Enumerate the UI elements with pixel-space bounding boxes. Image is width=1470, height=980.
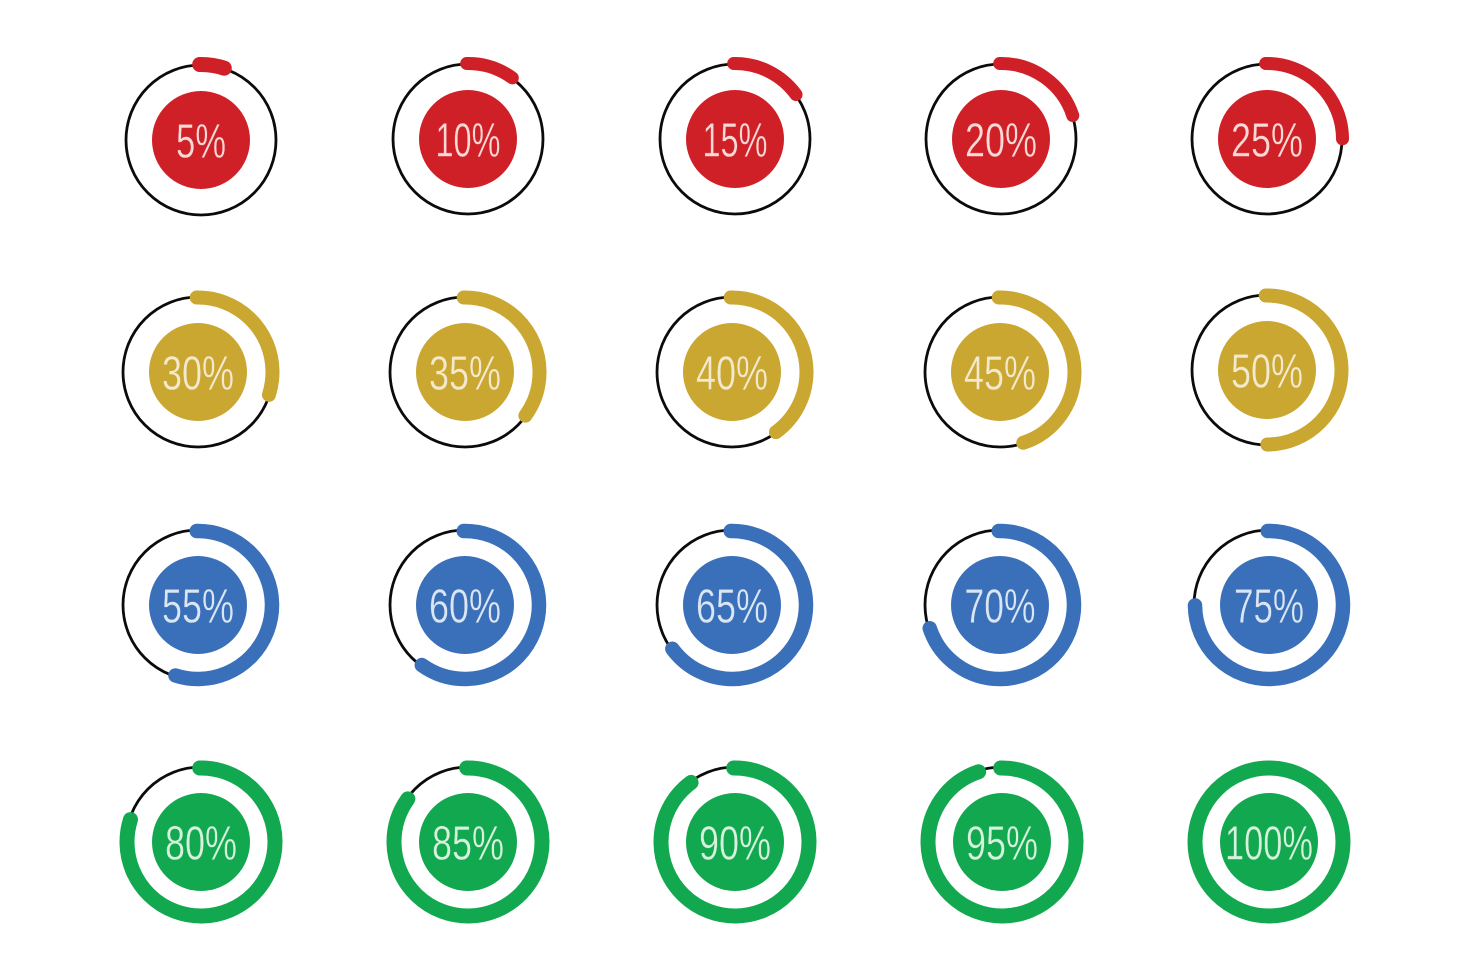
gauge: 40%: 40%	[696, 348, 768, 400]
gauge: 5%	[124, 63, 278, 217]
gauge: 35%	[389, 296, 541, 448]
gauge: 25%	[1190, 62, 1344, 216]
gauge: 60%	[390, 530, 540, 680]
gauge: 95%: 95%	[966, 818, 1038, 870]
gauge: 30%: 30%	[162, 348, 234, 400]
gauge: 70%	[925, 530, 1075, 680]
gauge: 45%	[924, 296, 1076, 448]
gauge: 85%	[393, 767, 543, 917]
gauge: 15%: 15%	[702, 114, 768, 168]
gauge: 65%: 65%	[696, 580, 768, 634]
gauge: 5%: 5%	[176, 116, 226, 168]
gauge: 55%: 55%	[162, 580, 234, 634]
gauge: 35%: 35%	[429, 348, 501, 400]
gauge: 80%	[126, 767, 276, 917]
gauge: 90%: 90%	[699, 818, 771, 870]
gauge: 50%: 50%	[1231, 346, 1303, 398]
gauge: 10%: 10%	[436, 114, 500, 168]
gauge: 50%	[1191, 294, 1343, 446]
gauge: 90%	[660, 767, 810, 917]
gauge: 45%: 45%	[964, 348, 1036, 400]
gauge: 85%: 85%	[432, 818, 504, 870]
gauge: 20%: 20%	[965, 114, 1037, 168]
gauge: 75%: 75%	[1234, 580, 1304, 634]
gauge: 10%	[391, 62, 545, 216]
gauge: 40%	[656, 296, 808, 448]
gauge: 100%	[1195, 768, 1343, 916]
gauge: 75%	[1194, 530, 1344, 680]
gauge: 30%	[122, 296, 274, 448]
gauge: 70%: 70%	[964, 580, 1036, 634]
gauge: 60%: 60%	[429, 580, 501, 634]
gauge: 80%: 80%	[165, 818, 237, 870]
gauge: 55%	[123, 530, 273, 680]
gauge: 20%	[924, 62, 1078, 216]
gauge: 15%	[658, 62, 812, 216]
gauge: 95%	[927, 767, 1077, 917]
gauge: 100%: 100%	[1225, 818, 1313, 870]
gauge: 65%	[657, 530, 807, 680]
gauge: 25%: 25%	[1231, 114, 1303, 168]
